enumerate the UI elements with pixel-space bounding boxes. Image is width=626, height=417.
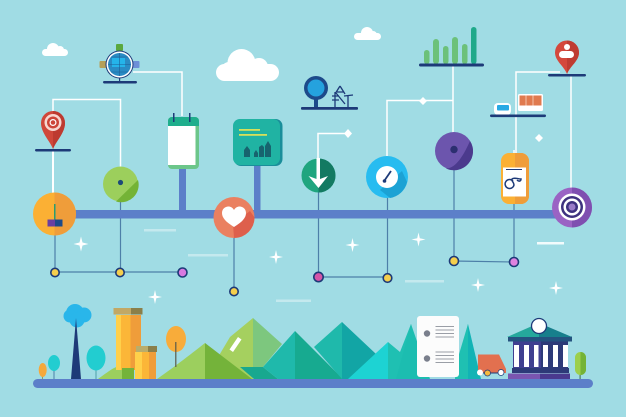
node: clock circle: [366, 156, 408, 198]
junction dots: [51, 256, 519, 296]
diamond markers: [344, 97, 543, 142]
cloud: large centre: [216, 49, 279, 81]
bank building: [507, 318, 572, 379]
icon: bar chart: [419, 27, 484, 66]
icon: vehicle and container shelf: [490, 94, 546, 117]
node: green circle: [103, 166, 139, 202]
node: download arrow circle: [302, 158, 336, 192]
ground bar: [33, 379, 593, 388]
thin node connectors: [55, 168, 514, 291]
node: orange tag: [501, 153, 529, 204]
cloud: small right: [354, 27, 381, 40]
main horizontal bar: [70, 165, 560, 218]
icon: globe: [100, 44, 140, 84]
decorative dashes: [144, 229, 564, 302]
node: heart circle: [214, 197, 254, 238]
icon: calendar: [168, 113, 199, 169]
white connector lines: [53, 65, 571, 204]
icon: person map pin: [548, 40, 586, 76]
node: orange circle: [33, 192, 76, 236]
landscape: green bush tree: [575, 352, 586, 380]
icon: teal chart card: [233, 119, 282, 166]
icon: magnifier and trees: [301, 76, 358, 110]
sparkles: [74, 232, 563, 304]
document card: [417, 316, 459, 377]
landscape: orange tree: [166, 326, 186, 367]
landscape: mountains: [157, 318, 481, 379]
landscape: trees left: [39, 304, 106, 379]
icon: target map pin: [35, 111, 71, 152]
landscape: towers: [98, 308, 157, 379]
truck: [477, 354, 506, 376]
node: purple target: [552, 188, 592, 228]
cloud: small left: [42, 43, 68, 56]
node: purple disc: [435, 132, 473, 170]
